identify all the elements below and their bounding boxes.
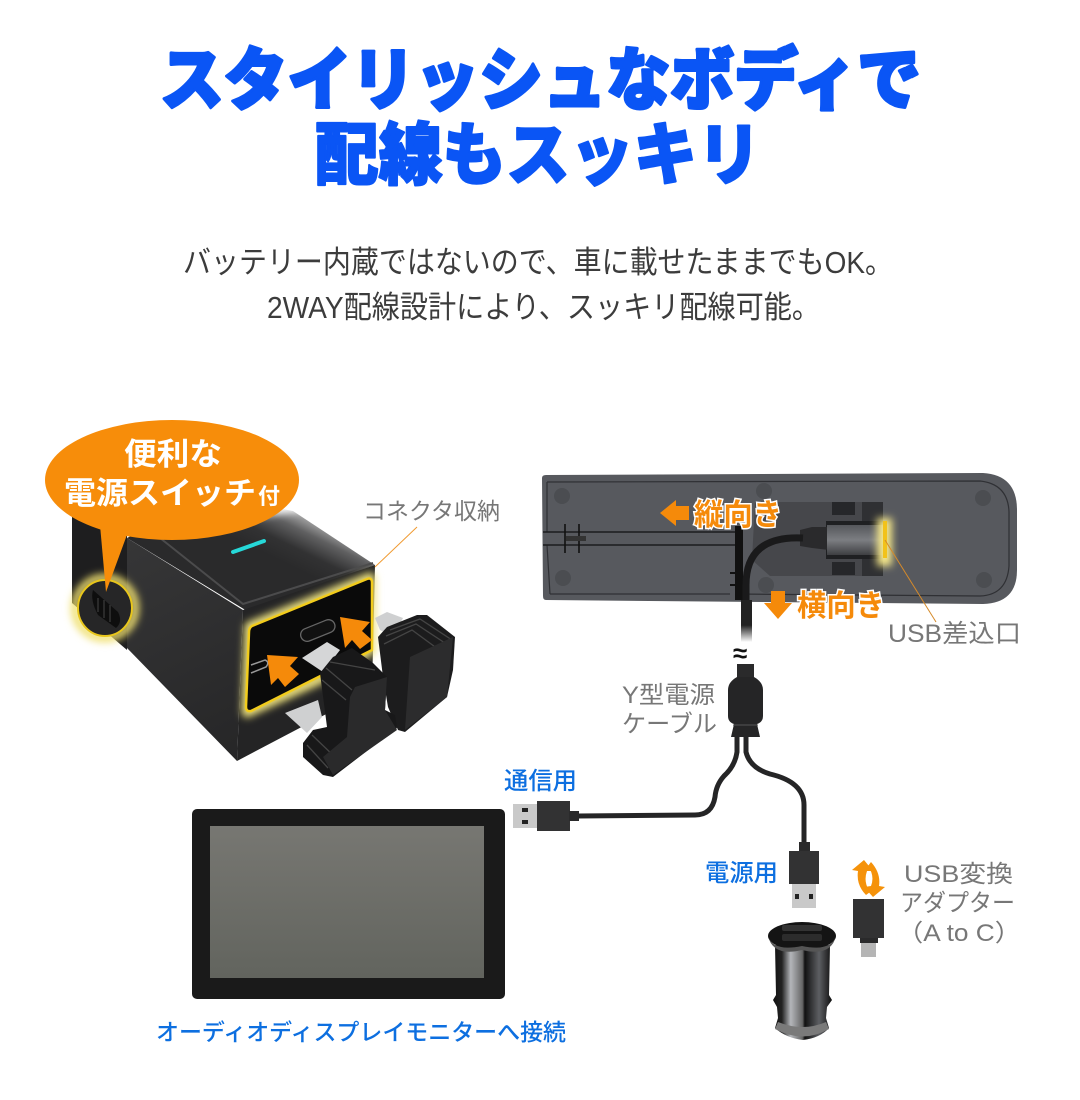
break mark: ≈	[733, 638, 747, 668]
connector right	[375, 612, 455, 732]
arrow: horizontal orientation	[764, 591, 792, 619]
arrow: vertical orientation	[660, 500, 689, 526]
label: USB port	[885, 540, 1021, 648]
bubble text: 電源スイッチ	[64, 476, 256, 511]
label: monitor connection: オーディオディスプレイモニターへ接続	[156, 1019, 566, 1045]
back panel	[542, 473, 1017, 625]
title: スタイリッシュなボディで	[160, 25, 921, 124]
label: USB adapter: （A to C）	[897, 920, 1021, 947]
status LED	[233, 541, 264, 552]
panel inner outline	[547, 481, 1009, 596]
USB-C port upper	[299, 618, 337, 643]
label: power: 電源用	[705, 860, 778, 887]
label: connector storage: コネクタ収納	[363, 498, 500, 524]
icon: swap arrows	[852, 860, 885, 897]
orange arrow left	[267, 655, 299, 687]
switch highlight	[75, 578, 135, 638]
feet	[554, 483, 992, 593]
label: Y cable: ケーブル	[622, 711, 717, 738]
label: vertical orientation: 縦向き	[694, 499, 782, 532]
device top edge highlight	[150, 530, 373, 604]
bubble text	[64, 437, 280, 511]
bubble text: 便利な	[124, 437, 222, 472]
monitor screen	[210, 826, 484, 978]
cable on panel	[746, 538, 803, 625]
connector recess	[246, 578, 372, 711]
bubble: power switch callout	[45, 420, 299, 592]
label: USB adapter: USB変換	[904, 861, 1013, 888]
connector left	[285, 642, 397, 777]
USB-C port lower	[251, 660, 268, 673]
USB plug: power	[789, 842, 819, 908]
USB-C adapter	[853, 899, 884, 957]
USB plug	[800, 527, 829, 550]
label: data: 通信用	[504, 768, 577, 795]
vertical channel	[735, 526, 743, 600]
label: connector storage	[363, 498, 500, 567]
power switch	[78, 580, 132, 636]
intro text: バッテリー内蔵ではないので、車に載せたままでもOK。	[183, 245, 893, 280]
label: USB adapter	[897, 861, 1021, 947]
device: connector storage view	[72, 480, 455, 777]
socket recess	[752, 502, 883, 576]
intro text: 2WAY配線設計により、スッキリ配線可能。	[267, 290, 820, 325]
cable slot	[543, 532, 735, 545]
device top face	[127, 495, 375, 611]
monitor	[192, 809, 505, 999]
USB plug: data	[513, 801, 579, 831]
USB port glow	[877, 518, 892, 566]
title: 配線もスッキリ	[315, 100, 761, 199]
cable branches	[578, 737, 737, 816]
bubble text: 付	[258, 484, 280, 509]
glow around recess	[247, 578, 370, 712]
label: horizontal orientation: 横向き	[797, 590, 885, 623]
label: USB port: USB差込口	[888, 620, 1021, 648]
title	[160, 25, 921, 199]
main cable fading	[741, 600, 752, 642]
intro text	[183, 245, 893, 325]
label: Y cable	[622, 682, 717, 738]
top face white fade	[215, 480, 320, 516]
orange arrow right	[340, 617, 372, 649]
label: Y cable: Y型電源	[622, 682, 715, 709]
device front face	[237, 565, 375, 761]
Y cable junction	[578, 664, 804, 852]
device side face	[127, 538, 243, 761]
car charger	[768, 922, 836, 1040]
device left housing	[72, 505, 127, 650]
label: USB adapter: アダプター	[900, 890, 1015, 917]
